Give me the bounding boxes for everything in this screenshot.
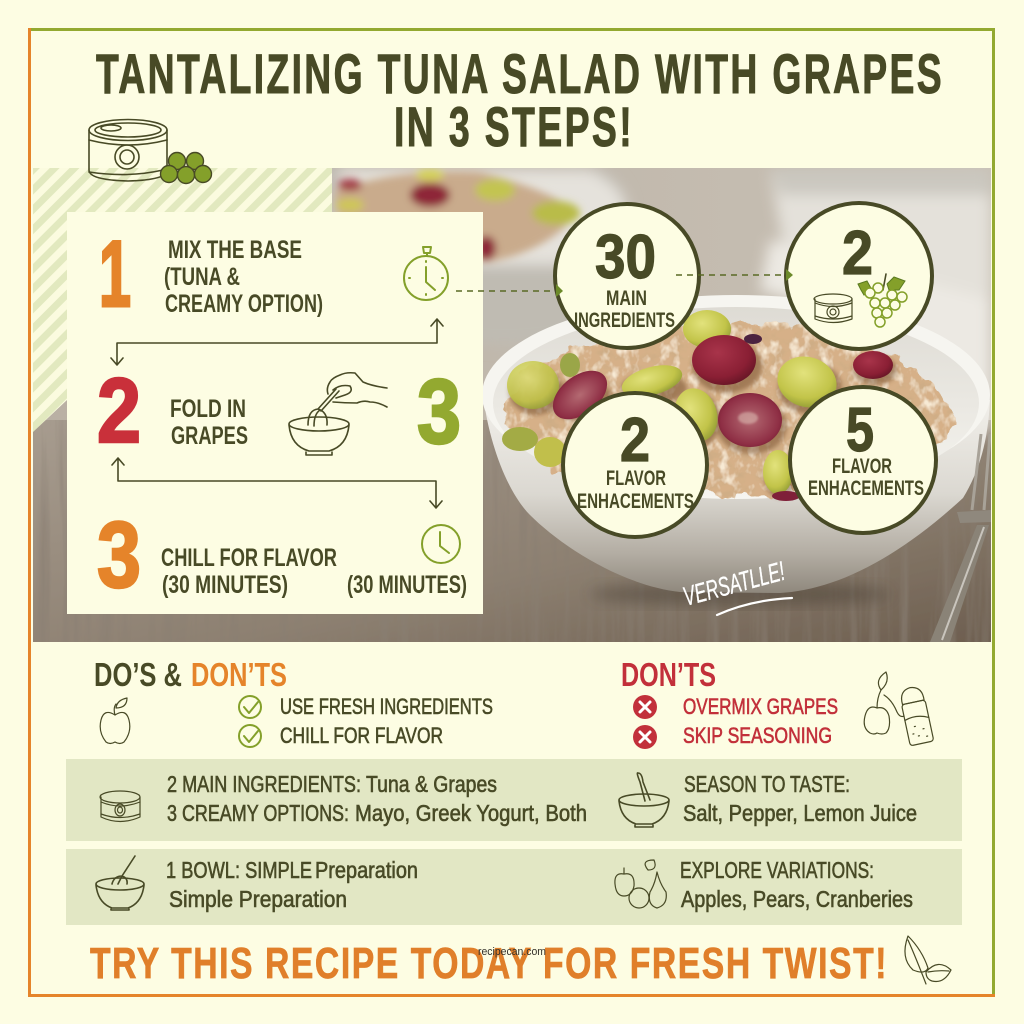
stat: 2 flavor enhancements: ENHACEMENTS bbox=[577, 490, 694, 513]
seasoning text: SEASON TO TASTE: bbox=[684, 771, 850, 797]
stat: 2 with can and grapes bbox=[786, 203, 932, 349]
stat: 30 main ingredients: 30 bbox=[595, 223, 656, 292]
step 1 text bbox=[164, 236, 323, 318]
duration label: (30 MINUTES) bbox=[347, 571, 467, 599]
arrow: step 1 to step 2 bbox=[111, 319, 443, 365]
preparation text: Preparation bbox=[315, 857, 418, 883]
ingredient text bbox=[167, 771, 587, 826]
icon: clock bbox=[422, 525, 460, 563]
icon: fruit and salt shaker bbox=[864, 672, 934, 746]
preparation text bbox=[166, 857, 418, 912]
ingredient text: Mayo, Greek Yogurt, Both bbox=[355, 800, 587, 826]
icon: grapes bbox=[858, 274, 907, 327]
step 1 text: (TUNA & bbox=[164, 263, 240, 291]
section heading: don'ts: DON’TS bbox=[621, 656, 716, 693]
icon: apples and pears bbox=[615, 860, 666, 908]
section heading: do's and don'ts: DO’S & bbox=[94, 656, 182, 693]
stat: 30 main ingredients: INGREDIENTS bbox=[574, 309, 675, 332]
icon: can bbox=[100, 791, 140, 822]
step 2 text bbox=[170, 395, 248, 450]
handwritten note: versatile bbox=[680, 556, 792, 615]
decorative number 3: 3 bbox=[417, 361, 461, 463]
stat: 2 flavor enhancements bbox=[563, 393, 707, 537]
main bowl bbox=[482, 295, 990, 593]
stat: 5 flavor enhancements: FLAVOR bbox=[832, 455, 892, 478]
stat: 2 with can and grapes: 2 bbox=[842, 219, 873, 288]
title: IN 3 STEPS! bbox=[394, 95, 634, 158]
seasoning text: Salt, Pepper, Lemon Juice bbox=[683, 800, 917, 826]
icon: bowl with spoon bbox=[619, 773, 669, 827]
stat: 2 flavor enhancements: 2 bbox=[620, 406, 650, 475]
section heading: do's and don'ts: DON’TS bbox=[191, 656, 287, 693]
step 2 text: FOLD IN bbox=[170, 395, 246, 423]
step 3 text: (30 MINUTES) bbox=[162, 571, 288, 599]
icon: cross bbox=[633, 695, 657, 719]
stat: 30 main ingredients: MAIN bbox=[606, 287, 647, 310]
step 1 text: CREAMY OPTION) bbox=[165, 290, 323, 318]
striped background panel bbox=[33, 168, 332, 432]
do's list: USE FRESH INGREDIENTS bbox=[280, 694, 493, 719]
icon: whisking in a bowl bbox=[289, 373, 387, 455]
preparation text: Simple Preparation bbox=[169, 886, 347, 912]
step 2 text: GRAPES bbox=[171, 422, 248, 450]
step 3 text bbox=[161, 544, 337, 599]
icon: can bbox=[814, 294, 852, 322]
ingredient text: Tuna & Grapes bbox=[366, 771, 497, 797]
icon: apple bbox=[100, 698, 130, 744]
info band: preparation and variations bbox=[66, 849, 962, 925]
fork bbox=[930, 434, 991, 642]
variations text: Apples, Pears, Cranberies bbox=[681, 886, 913, 912]
icon: tuna can and peas bbox=[89, 120, 212, 184]
ingredient text: 3 CREAMY OPTIONS: bbox=[167, 800, 349, 826]
icon: leaves bbox=[905, 936, 951, 984]
ingredient text: 2 MAIN INGREDIENTS: bbox=[167, 771, 361, 797]
stat: 5 flavor enhancements: ENHACEMENTS bbox=[808, 477, 924, 500]
variations text: EXPLORE VARIATIONS: bbox=[680, 857, 874, 883]
icon: bowl with whisk bbox=[96, 856, 144, 910]
section heading: do's and don'ts bbox=[94, 656, 287, 693]
panel: three steps bbox=[67, 212, 483, 614]
step 1 text: MIX THE BASE bbox=[168, 236, 302, 264]
connector: between circles bbox=[676, 274, 787, 276]
photo: bowl of tuna salad with grapes bbox=[33, 168, 991, 642]
icon: cross 2 bbox=[633, 725, 657, 749]
preparation text: 1 BOWL: SIMPLE bbox=[166, 857, 312, 883]
stat: 5 flavor enhancements: 5 bbox=[846, 396, 874, 465]
icon: stopwatch bbox=[404, 247, 448, 300]
do's list: CHILL FOR FLAVOR bbox=[280, 723, 443, 748]
arrow: step 2 to step 3 bbox=[112, 458, 442, 508]
step 1 number: 1 bbox=[99, 221, 131, 326]
handwritten note: versatile: VERSATLLE! bbox=[680, 556, 788, 612]
seasoning text bbox=[683, 771, 917, 826]
connector: stopwatch to circle bbox=[456, 290, 553, 292]
don'ts list: OVERMIX GRAPES bbox=[683, 694, 838, 719]
stat: 2 flavor enhancements: FLAVOR bbox=[606, 467, 666, 490]
info band: ingredients and seasoning bbox=[66, 759, 962, 841]
stat: 30 main ingredients bbox=[555, 204, 699, 348]
grape shadows bbox=[509, 339, 897, 498]
step 3 text: CHILL FOR FLAVOR bbox=[161, 544, 337, 572]
do's list bbox=[239, 694, 493, 748]
title bbox=[96, 42, 944, 158]
icon: check bbox=[239, 696, 261, 718]
tuna salad bbox=[502, 321, 958, 497]
step 2 number: 2 bbox=[97, 360, 141, 462]
don'ts list: SKIP SEASONING bbox=[683, 723, 832, 748]
icon: check 2 bbox=[239, 725, 261, 747]
step 3 number: 3 bbox=[97, 502, 141, 607]
variations text bbox=[680, 857, 913, 912]
grapes bbox=[502, 310, 893, 501]
stat: 5 flavor enhancements bbox=[790, 387, 936, 533]
watermark: recipecan.com bbox=[478, 946, 546, 958]
don'ts list bbox=[633, 694, 838, 749]
